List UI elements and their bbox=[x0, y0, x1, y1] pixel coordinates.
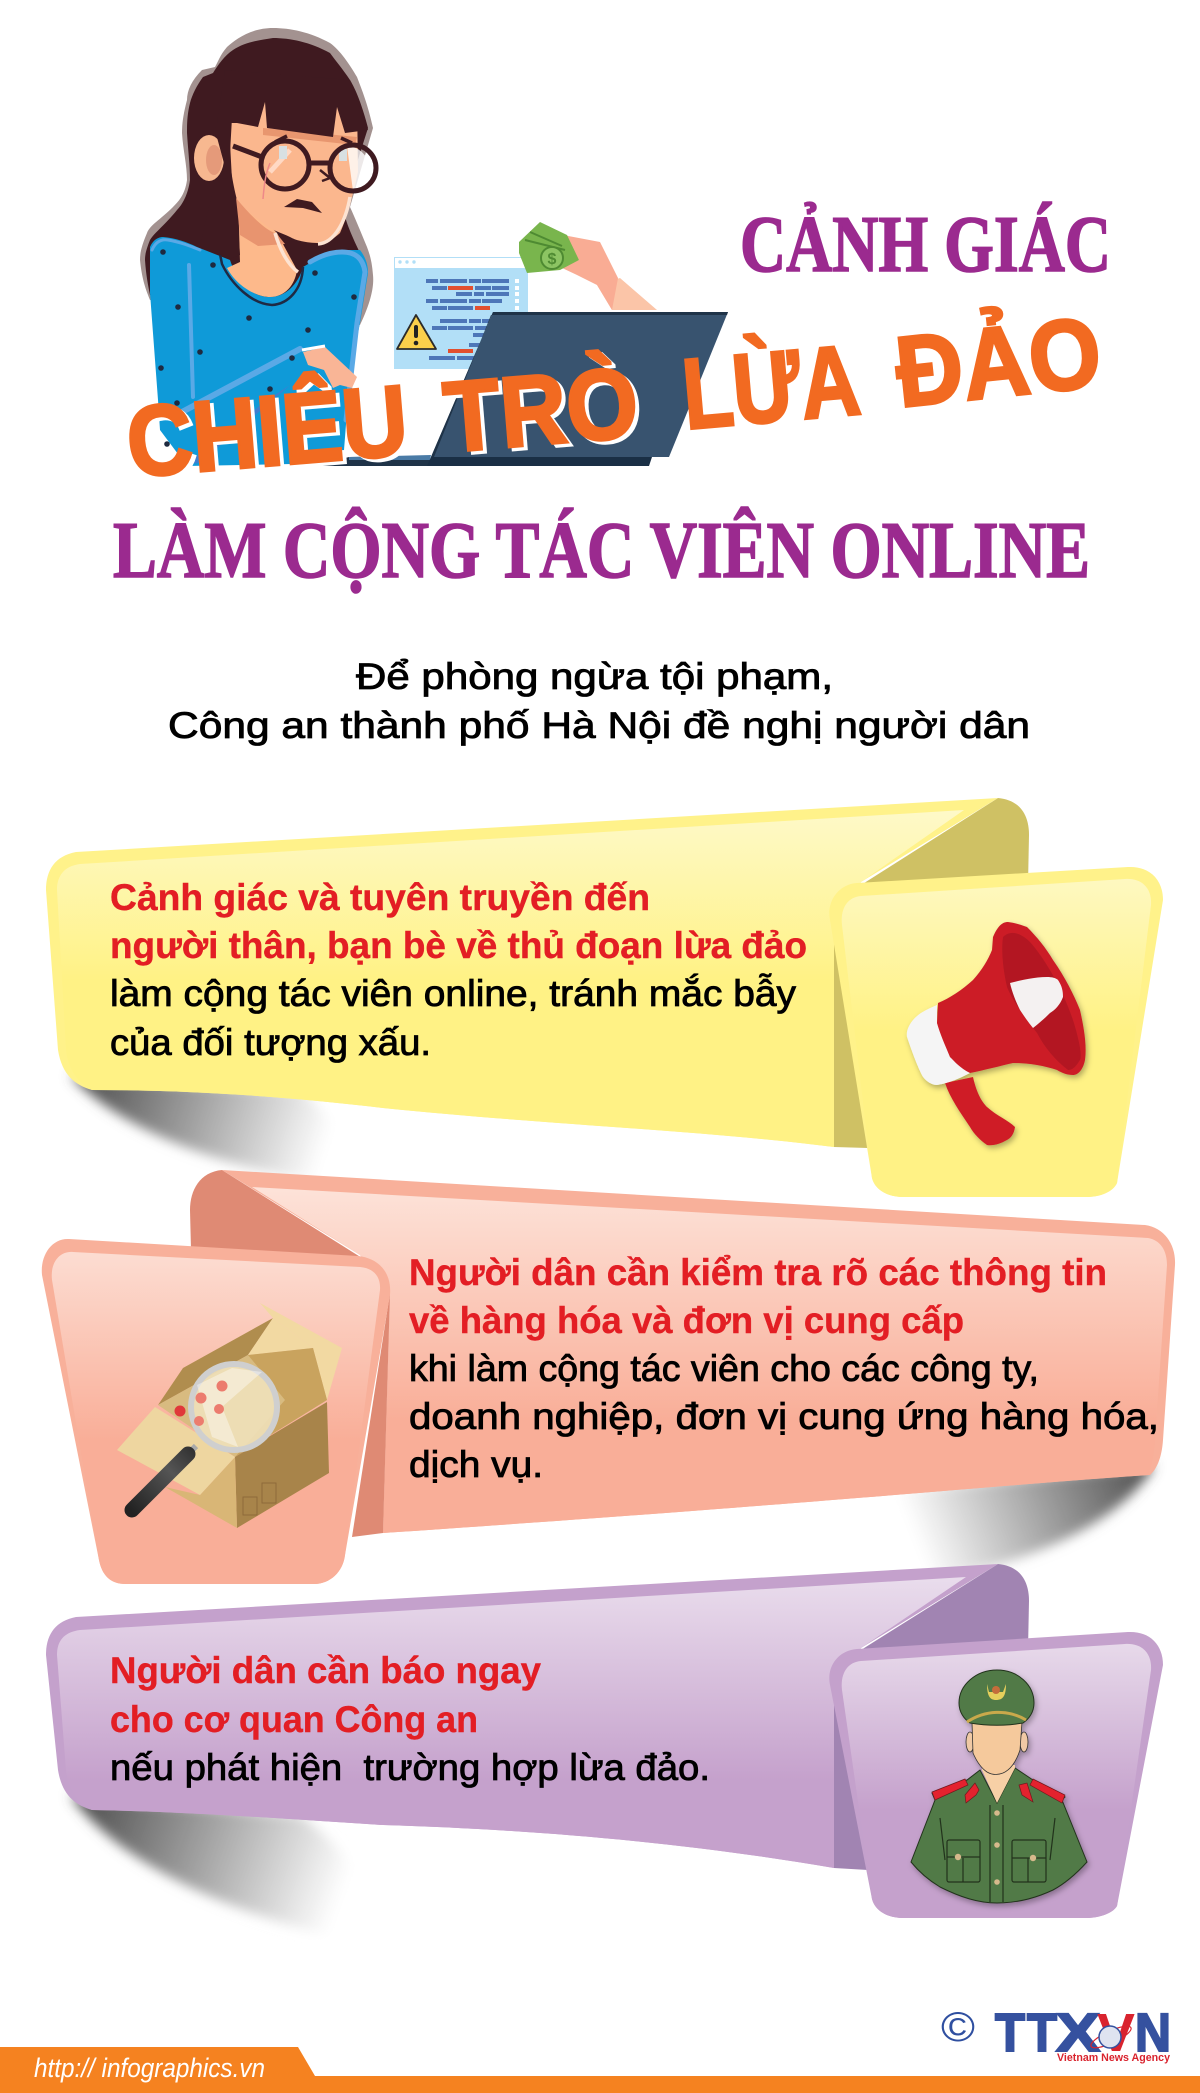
panel text: người thân, bạn bè về thủ đoạn lừa đảo bbox=[110, 925, 807, 966]
panel text: làm cộng tác viên online, tránh mắc bẫy bbox=[110, 973, 797, 1014]
intro text: Để phòng ngừa tội phạm, bbox=[356, 656, 833, 697]
panel text bbox=[110, 877, 807, 1063]
intro text: Công an thành phố Hà Nội đề nghị người dân bbox=[168, 705, 1030, 746]
band under fringe bbox=[263, 128, 357, 145]
panel text: Người dân cần kiểm tra rõ các thông tin bbox=[409, 1252, 1107, 1293]
ribbon body bbox=[46, 1564, 998, 1868]
footer bar bbox=[0, 2047, 1200, 2093]
heading: CHIÊU TRÒ LỪA ĐẢO: TRÒ bbox=[444, 349, 646, 477]
laptop bbox=[313, 312, 728, 466]
heading: CHIÊU TRÒ LỪA ĐẢO: LỪA bbox=[678, 324, 864, 451]
panel text: khi làm cộng tác viên cho các công ty, bbox=[409, 1348, 1039, 1389]
icon tab bbox=[42, 1239, 390, 1584]
hair shadow bbox=[140, 28, 373, 325]
icon: megaphone bbox=[907, 922, 1086, 1145]
copyright mark: © bbox=[941, 2003, 975, 2050]
ribbon highlight bbox=[57, 810, 964, 1147]
logo: TTXVN bbox=[941, 2003, 1171, 2064]
fringe bbox=[217, 70, 368, 137]
ribbon body bbox=[46, 798, 998, 1147]
icon tab bbox=[829, 867, 1163, 1197]
logo: TTXVN: T bbox=[1027, 2003, 1057, 2063]
icon tab highlight bbox=[842, 1644, 1151, 1918]
heading: CHIÊU TRÒ LỪA ĐẢO: CHIÊU bbox=[123, 364, 412, 499]
panel text: Cảnh giác và tuyên truyền đến bbox=[110, 877, 650, 918]
hair bbox=[145, 38, 368, 300]
panel text: dịch vụ. bbox=[409, 1444, 543, 1485]
logo: TTXVN: Vietnam News Agency bbox=[1057, 2052, 1171, 2064]
ribbon highlight bbox=[252, 1187, 1167, 1533]
ribbon body bbox=[222, 1170, 1175, 1533]
logo: TTXVN: X bbox=[1056, 2003, 1100, 2063]
ear bbox=[194, 135, 224, 181]
face light edges bbox=[275, 197, 350, 272]
sweater dots bbox=[158, 249, 357, 447]
panel text: của đối tượng xấu. bbox=[110, 1022, 431, 1063]
panel: yellow warning bbox=[46, 798, 1163, 1197]
face bbox=[230, 100, 358, 243]
logo: TTXVN: N bbox=[1135, 2003, 1171, 2063]
illustration: worried woman at laptop bbox=[140, 28, 728, 466]
icon tab highlight bbox=[52, 1252, 380, 1584]
ribbon highlight bbox=[57, 1577, 966, 1868]
panel: purple report bbox=[46, 1564, 1163, 1945]
hand with money: $ bbox=[548, 251, 557, 268]
panel text bbox=[110, 1650, 710, 1788]
neck bbox=[227, 195, 297, 297]
heading: CHIÊU TRÒ LỪA ĐẢO: CHIÊU bbox=[127, 367, 416, 502]
screen window bbox=[394, 257, 528, 369]
panel text: doanh nghiệp, đơn vị cung ứng hàng hóa, bbox=[409, 1396, 1159, 1437]
heading: CHIÊU TRÒ LỪA ĐẢO: ĐẢO bbox=[890, 295, 1106, 429]
sweater bbox=[150, 237, 368, 466]
mouth bbox=[284, 199, 322, 213]
collar line bbox=[220, 254, 303, 305]
heading: CẢNH GIÁC: CẢNH GIÁC bbox=[740, 201, 1111, 289]
fold strip bbox=[834, 930, 868, 1148]
icon tab highlight bbox=[842, 879, 1151, 1197]
side lock bbox=[200, 123, 240, 259]
curl shadow bbox=[70, 1075, 350, 1185]
back fold bbox=[861, 798, 1029, 885]
panel text bbox=[409, 1252, 1159, 1485]
fold strip bbox=[834, 1695, 868, 1870]
panel text: nếu phát hiện trường hợp lừa đảo. bbox=[110, 1747, 710, 1788]
back fold bbox=[861, 1564, 1029, 1650]
panel text: về hàng hóa và đơn vị cung cấp bbox=[409, 1300, 964, 1341]
logo: TTXVN: V bbox=[1097, 2003, 1135, 2063]
back fold bbox=[190, 1170, 362, 1258]
sweater light edges bbox=[152, 240, 365, 420]
fold strip bbox=[352, 1293, 390, 1537]
nose bbox=[320, 170, 330, 181]
heading: CHIÊU TRÒ LỪA ĐẢO: TRÒ bbox=[440, 346, 642, 474]
heading: CHIÊU TRÒ LỪA ĐẢO bbox=[123, 295, 1106, 502]
glasses bbox=[233, 136, 376, 191]
sweater shade band bbox=[187, 385, 290, 464]
intro text bbox=[168, 656, 1030, 746]
panel: salmon verify bbox=[42, 1170, 1175, 1590]
curl shadow bbox=[70, 1795, 380, 1945]
panel text: cho cơ quan Công an bbox=[110, 1699, 478, 1740]
icon: warning triangle bbox=[397, 315, 436, 349]
footer url: http:// infographics.vn bbox=[34, 2053, 265, 2083]
panel text: Người dân cần báo ngay bbox=[110, 1650, 541, 1691]
hand with money bbox=[519, 222, 657, 310]
hand on laptop bbox=[302, 346, 357, 388]
neck shadow bbox=[236, 198, 285, 246]
icon: police officer bbox=[911, 1670, 1087, 1903]
icon tab bbox=[829, 1632, 1163, 1918]
icon: box with magnifier bbox=[117, 1303, 342, 1528]
tear bbox=[263, 163, 270, 199]
logo: TTXVN: T bbox=[995, 2003, 1025, 2063]
curl shadow bbox=[860, 1465, 1155, 1590]
